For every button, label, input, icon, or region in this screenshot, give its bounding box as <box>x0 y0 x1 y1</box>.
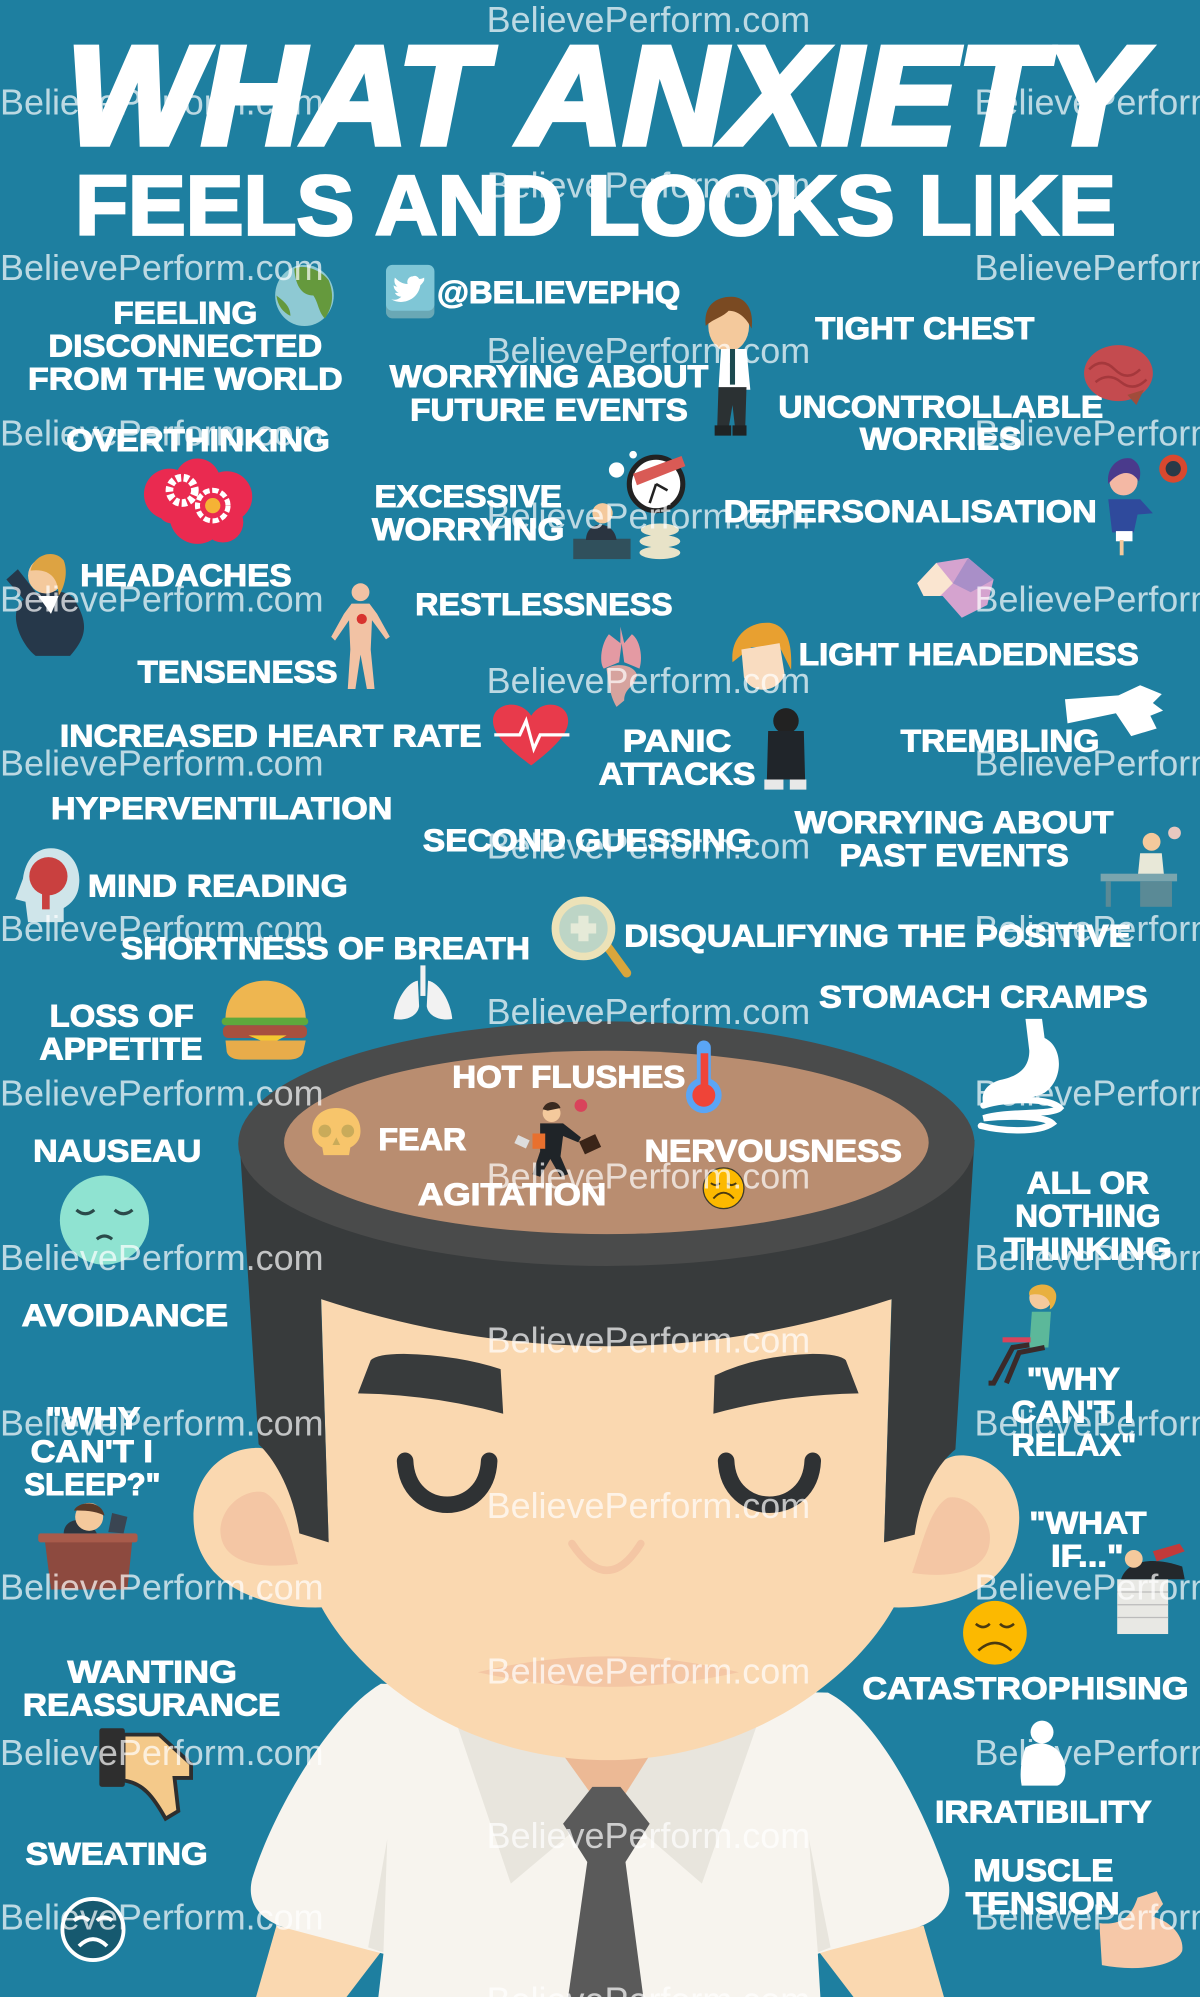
tie <box>563 1787 650 1997</box>
watermarks: BelievePerform.com <box>0 248 324 288</box>
label: panic attacks: PANIC <box>623 722 731 758</box>
title: FEELS AND LOOKS LIKE <box>75 158 1116 252</box>
label: feeling disconnected: DISCONNECTED <box>48 328 322 364</box>
label: tenseness: TENSENESS <box>138 654 338 690</box>
sleeve shadows <box>368 1839 831 1952</box>
label: depersonalisation: DEPERSONALISATION <box>724 493 1097 529</box>
shirt <box>251 1684 949 1997</box>
label: muscle tension: TENSION <box>966 1885 1120 1921</box>
open head interior <box>284 1051 929 1234</box>
label: tight chest: TIGHT CHEST <box>815 310 1035 346</box>
label: irratibility: IRRATIBILITY <box>935 1794 1152 1830</box>
label: feeling disconnected: FROM THE WORLD <box>28 361 343 397</box>
watermarks: BelievePerform.com <box>487 1321 810 1361</box>
label: why can't I sleep: SLEEP?" <box>24 1466 161 1502</box>
label: avoidance: AVOIDANCE <box>22 1297 228 1333</box>
watermarks: BelievePerform.com <box>487 1156 810 1196</box>
icon: thermometer <box>686 1041 722 1113</box>
label: why can't I relax: CAN'T I <box>1011 1394 1134 1430</box>
label: all or nothing thinking: ALL OR <box>1027 1164 1149 1200</box>
label: uncontrollable worries: UNCONTROLLABLE <box>778 389 1103 425</box>
watermarks: BelievePerform.com <box>487 826 810 866</box>
icon: burger <box>222 981 308 1060</box>
icon: kneeling figure <box>1021 1721 1065 1786</box>
label: stomach cramps: STOMACH CRAMPS <box>819 978 1148 1014</box>
twitter handle <box>386 265 680 318</box>
label: panic attacks: ATTACKS <box>599 756 755 792</box>
icon: heart with pulse <box>493 705 569 765</box>
icon: organs <box>601 627 641 707</box>
label: why can't I relax: "WHY <box>1027 1360 1120 1396</box>
label: overthinking: OVERTHINKING <box>66 422 330 458</box>
label: worrying about past events <box>795 804 1114 873</box>
left ear <box>193 1448 334 1608</box>
label: worrying about future events <box>390 358 709 427</box>
watermarks: BelievePerform.com <box>487 1486 810 1526</box>
watermarks: BelievePerform.com <box>0 1403 324 1443</box>
icon: woman head with orange hair <box>732 623 791 690</box>
icon: office worker at desk <box>1101 827 1181 907</box>
label: mind reading: MIND READING <box>88 868 348 904</box>
collar <box>457 1726 757 1884</box>
label: uncontrollable worries: WORRIES <box>860 421 1022 457</box>
watermarks: BelievePerform.com <box>0 744 324 784</box>
label: hyperventilation: HYPERVENTILATION <box>51 790 392 826</box>
label: catastrophising: CATASTROPHISING <box>862 1670 1189 1706</box>
label: worrying about future events: FUTURE EVENTS <box>410 391 688 427</box>
watermarks: BelievePerform.com <box>487 661 810 701</box>
watermarks: BelievePerform.com <box>0 909 324 949</box>
label: sweating: SWEATING <box>25 1836 208 1872</box>
icon: nauseous mint face <box>60 1176 149 1265</box>
label: what if: "WHAT <box>1029 1504 1147 1540</box>
label: nauseau: NAUSEAU <box>33 1133 201 1169</box>
watermarks: BelievePerform.com <box>487 1816 810 1856</box>
watermarks: BelievePerform.com <box>487 331 810 371</box>
icon: man on paper pile <box>1117 1544 1185 1634</box>
label: all or nothing thinking <box>1004 1164 1172 1267</box>
watermarks: BelievePerform.com <box>487 165 810 205</box>
label: why can't I sleep: "WHY <box>46 1400 140 1436</box>
label: light headedness: LIGHT HEADEDNESS <box>799 636 1139 672</box>
hair <box>239 1140 975 1542</box>
icon: deadline clock and worker <box>573 451 685 559</box>
label: shortness of breath: SHORTNESS OF BREATH <box>121 930 530 966</box>
icon: skull <box>312 1108 361 1155</box>
watermarks: BelievePerform.com <box>0 1238 324 1278</box>
icon: sad outline face <box>62 1899 124 1960</box>
watermarks: BelievePerform.com <box>0 1073 324 1113</box>
title <box>66 17 1151 252</box>
label: feeling disconnected: FEELING <box>113 294 257 330</box>
label: loss of appetite: APPETITE <box>39 1031 203 1067</box>
label: uncontrollable worries <box>778 389 1103 457</box>
label: headaches: HEADACHES <box>80 557 292 593</box>
label: excessive worrying: EXCESSIVE <box>375 478 562 514</box>
twitter handle: @BELIEVEPHQ <box>437 274 680 310</box>
label: wanting reassurance <box>23 1653 280 1723</box>
label: second guessing: SECOND GUESSING <box>423 822 752 858</box>
icon: anatomy body <box>331 583 390 689</box>
label: disqualifying the positive: DISQUALIFYING THE POSITIVE <box>624 917 1131 953</box>
label: why can't I sleep: CAN'T I <box>31 1433 153 1469</box>
icon: globe <box>275 265 334 326</box>
icon: flexed arm <box>1099 1891 1182 1968</box>
neck <box>561 1751 652 1796</box>
label: hot flushes: HOT FLUSHES <box>452 1059 685 1095</box>
icon: sad standing man <box>705 297 752 436</box>
watermarks: BelievePerform.com <box>487 497 810 537</box>
face <box>303 1293 912 1760</box>
label: agitation: AGITATION <box>418 1176 606 1212</box>
watermarks: BelievePerform.com <box>487 0 810 40</box>
icon: brain <box>1084 345 1153 405</box>
label: restlessness: RESTLESSNESS <box>415 586 673 622</box>
watermarks: BelievePerform.com <box>0 579 324 619</box>
icon: man asleep at desk <box>38 1503 138 1589</box>
icon: small sad face <box>703 1168 744 1209</box>
hair rim <box>238 1021 975 1266</box>
label: feeling disconnected <box>28 294 343 397</box>
icon: rushing businessman <box>514 1099 601 1177</box>
label: all or nothing thinking: NOTHING <box>1015 1197 1161 1233</box>
icon: red flower with gears <box>144 458 252 544</box>
icon: lungs <box>394 965 452 1020</box>
label: muscle tension: MUSCLE <box>973 1852 1113 1888</box>
icon: thumbs down <box>99 1728 191 1819</box>
label: excessive worrying: WORRYING <box>372 511 564 547</box>
label: worrying about future events: WORRYING ABOUT <box>390 358 709 394</box>
icon: stomach and intestines <box>981 1019 1060 1130</box>
label: fear: FEAR <box>378 1121 466 1157</box>
label: loss of appetite <box>39 998 203 1067</box>
nose <box>572 1544 641 1570</box>
watermarks: BelievePerform.com <box>487 1652 810 1692</box>
watermarks: BelievePerform.com <box>0 414 324 454</box>
mouth <box>478 1656 739 1687</box>
label: what if: IF..." <box>1051 1538 1124 1574</box>
icon: magnifier <box>555 900 627 973</box>
arms <box>256 1926 944 1997</box>
icon: woman with headache <box>6 554 84 656</box>
label: loss of appetite: LOSS OF <box>50 998 194 1034</box>
label: wanting reassurance: WANTING <box>68 1653 237 1689</box>
label: worrying about past events: WORRYING ABOUT <box>795 804 1114 840</box>
label: what if <box>1029 1504 1147 1574</box>
icon: sad yellow face <box>963 1601 1027 1665</box>
watermarks: BelievePerform.com <box>0 83 324 123</box>
icon: crystal brain <box>917 558 994 618</box>
illustration: cartoon man with open head <box>193 1021 1019 1997</box>
title: WHAT ANXIETY <box>66 17 1151 174</box>
label: all or nothing thinking: THINKING <box>1004 1231 1172 1267</box>
closed eyes <box>405 1461 813 1505</box>
label: worrying about past events: PAST EVENTS <box>839 837 1069 873</box>
icon: head with brain <box>15 848 79 922</box>
label: wanting reassurance: REASSURANCE <box>23 1687 280 1723</box>
watermarks: BelievePerform.com <box>487 992 810 1032</box>
label: increased heart rate: INCREASED HEART RATE <box>60 717 482 753</box>
label: why can't I relax: RELAX" <box>1011 1427 1136 1463</box>
label: trembling: TREMBLING <box>901 722 1099 758</box>
icon: trembling hand <box>1065 685 1163 736</box>
icon: person with laptop <box>989 1284 1056 1383</box>
watermarks: BelievePerform.com <box>0 1898 324 1937</box>
label: excessive worrying <box>372 478 564 547</box>
label: panic attacks <box>599 722 755 792</box>
right ear <box>882 1455 1019 1608</box>
eyebrows <box>358 1354 859 1414</box>
icon: crouching figure <box>764 708 806 790</box>
watermarks: BelievePerform.com <box>0 1733 324 1773</box>
label: why can't I relax <box>1011 1360 1136 1463</box>
label: muscle tension <box>966 1852 1120 1921</box>
label: nervousness: NERVOUSNESS <box>645 1133 902 1169</box>
label: why can't I sleep <box>24 1400 161 1502</box>
icon: woman with splitting head <box>1108 455 1187 555</box>
watermarks: BelievePerform.com <box>0 1568 324 1608</box>
